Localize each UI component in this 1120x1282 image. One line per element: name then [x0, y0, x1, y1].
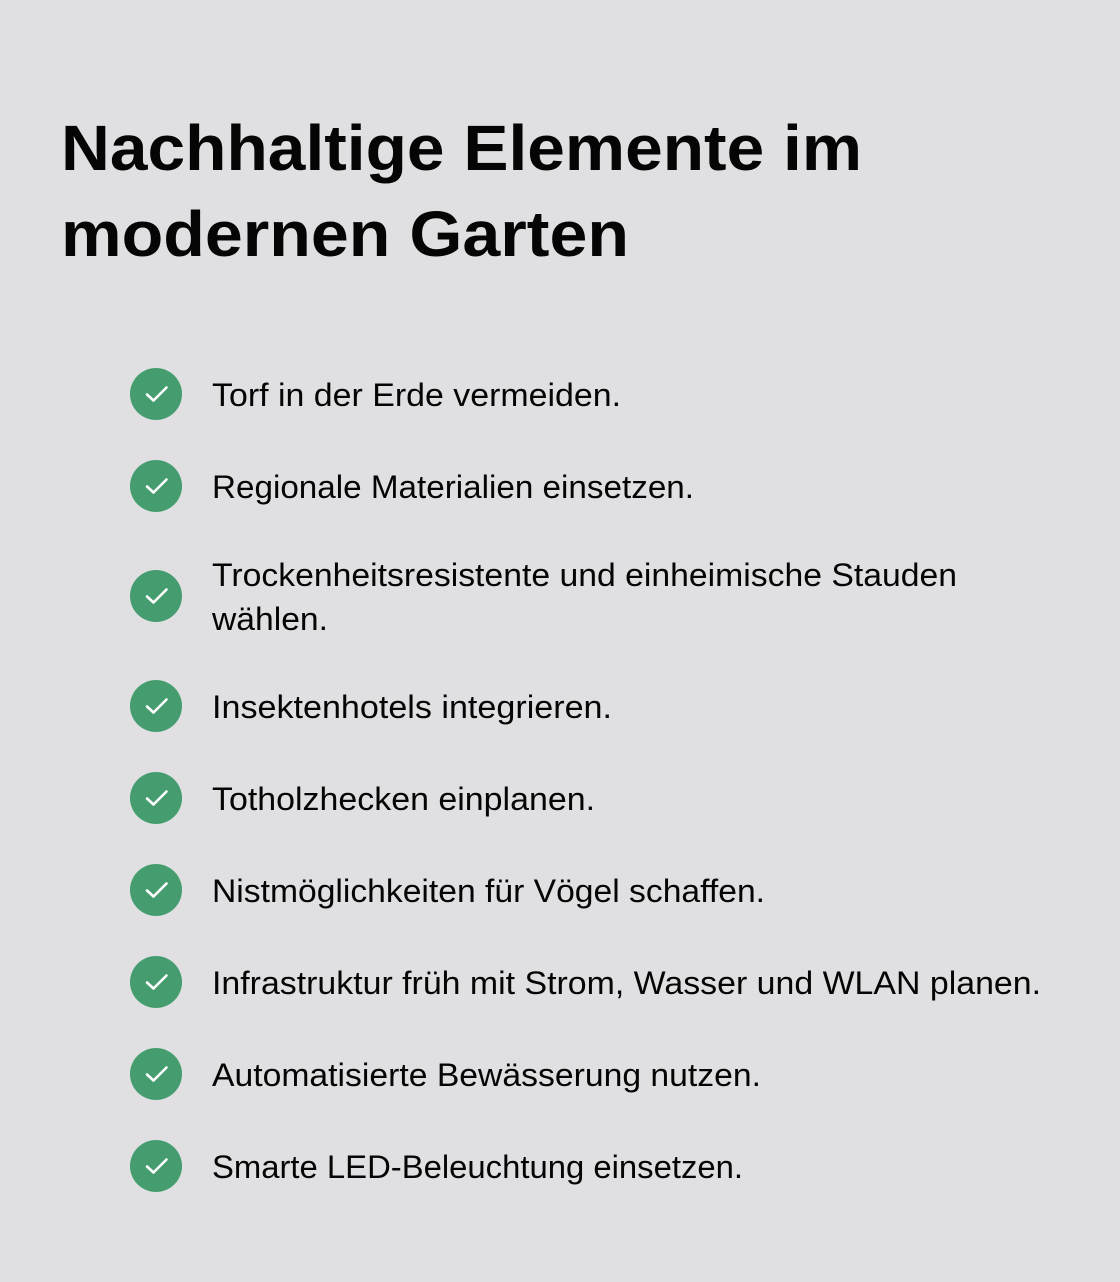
title: Nachhaltige Elemente im: [61, 112, 862, 184]
item: Bewässerung: Automatisierte Bewässerung nutzen.: [212, 1057, 761, 1093]
title: [61, 112, 862, 270]
item: Totholzhecken: Totholzhecken einplanen.: [212, 781, 595, 817]
item: Regionale Materialien: Regionale Materialien einsetzen.: [212, 469, 694, 505]
item: LED-Beleuchtung: Smarte LED-Beleuchtung einsetzen.: [212, 1149, 743, 1185]
item: Nistmöglichkeiten: [130, 864, 765, 916]
item: Regionale Materialien: [130, 460, 694, 512]
item: Torf: [130, 368, 621, 420]
item: Trockenheitsresistente Stauden: Trockenheitsresistente und einheimische Stauden: [212, 557, 957, 593]
item: Bewässerung: [130, 1048, 761, 1100]
item: Torf: Torf in der Erde vermeiden.: [212, 377, 621, 413]
item: Infrastruktur: [130, 956, 1041, 1008]
item: LED-Beleuchtung: [130, 1140, 743, 1192]
item: Infrastruktur: Infrastruktur früh mit Strom, Wasser und WLAN planen.: [212, 965, 1041, 1001]
checklist: [130, 368, 1041, 1192]
item: Insektenhotels: [130, 680, 612, 732]
item: Totholzhecken: [130, 772, 595, 824]
item: Nistmöglichkeiten: Nistmöglichkeiten für Vögel schaffen.: [212, 873, 765, 909]
item: Trockenheitsresistente Stauden: wählen.: [211, 601, 328, 637]
item: Trockenheitsresistente Stauden: [130, 557, 957, 637]
item: Insektenhotels: Insektenhotels integrieren.: [212, 689, 612, 725]
title: modernen Garten: [61, 198, 629, 270]
